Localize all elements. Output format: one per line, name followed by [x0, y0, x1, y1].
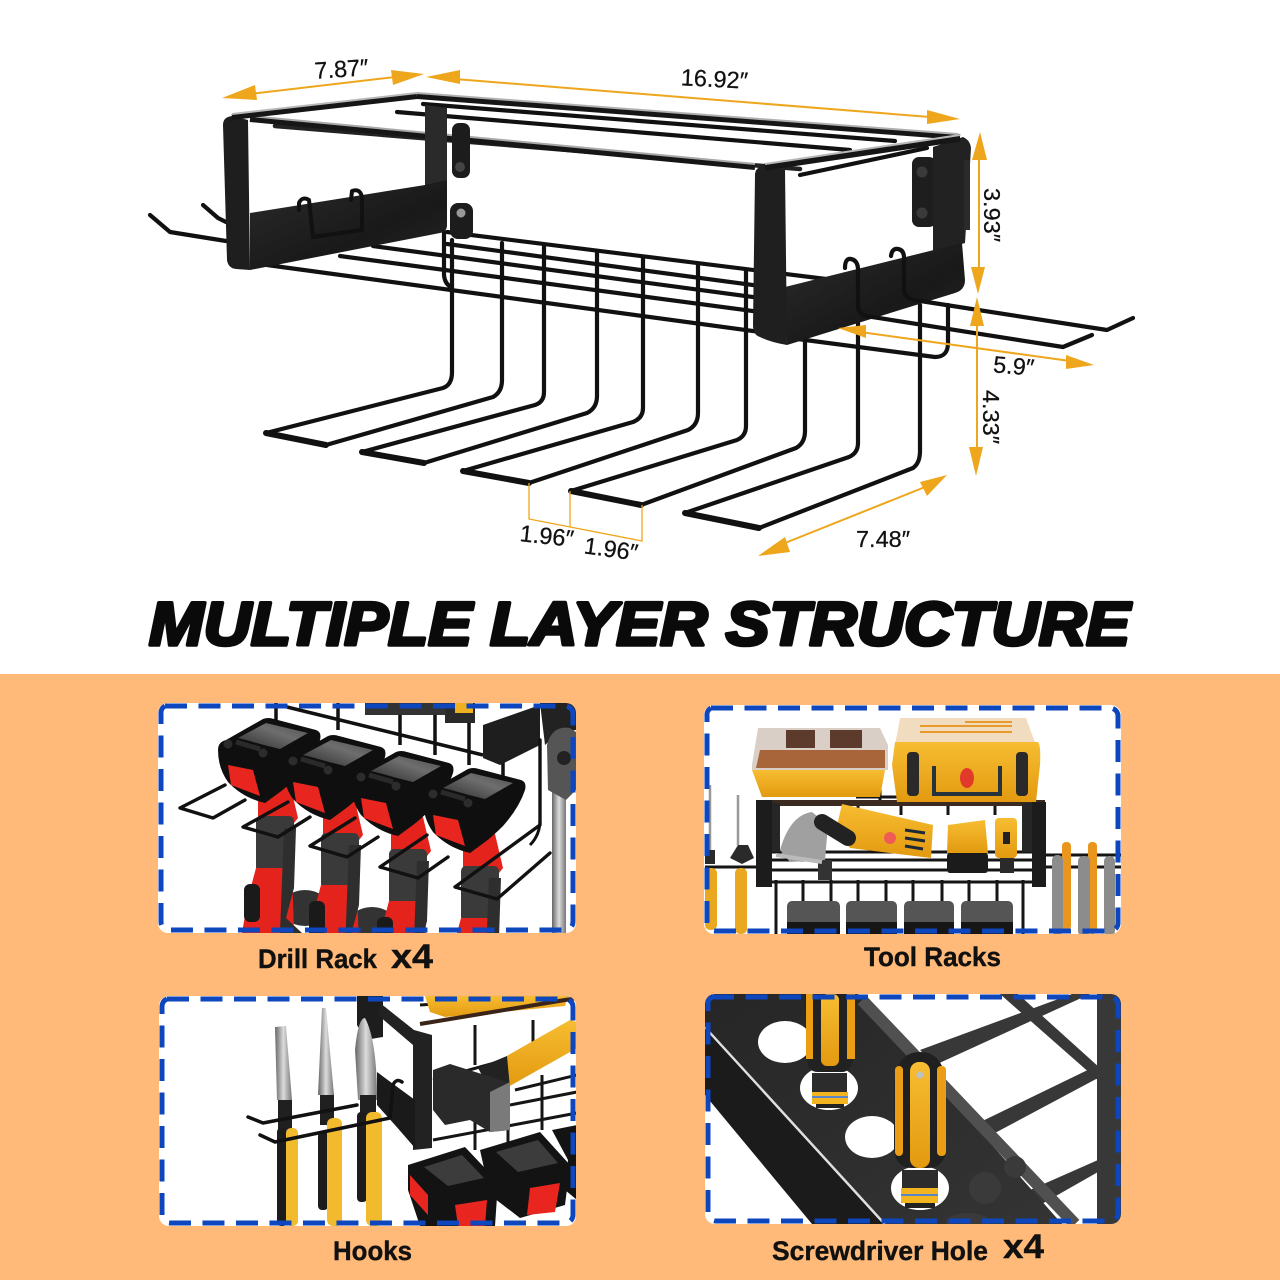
label: screwdriver hole x4: [772, 1228, 1044, 1266]
dimension labels: 5.9″: [992, 351, 1035, 381]
label: drill rack x4: Drill Rack: [258, 944, 378, 974]
dark diagonal upper band: [705, 994, 1062, 1224]
dimension labels: 1.96″: [519, 520, 575, 552]
label: hooks: Hooks: [333, 1236, 412, 1266]
batteries: [218, 718, 526, 853]
panel: tool racks: [704, 705, 1121, 936]
orange background band: [0, 674, 1280, 1280]
label: tool racks: Tool Racks: [864, 942, 1001, 972]
hook wires: [248, 1105, 357, 1123]
product: wire rack with dimensions: [150, 54, 1133, 566]
bracket lines: 1.96 spacing: [529, 483, 642, 541]
screwdriver 1: [805, 994, 855, 1108]
posts: [756, 800, 1045, 806]
dimension labels: 7.48″: [856, 526, 910, 552]
dark diagonal lower band: [705, 1029, 883, 1224]
holes: [758, 1021, 949, 1210]
bolts: [946, 1156, 1026, 1224]
dimension labels: [314, 54, 1035, 566]
yellow case: [896, 718, 1035, 742]
yellow tray: [752, 728, 888, 770]
grid wires: [150, 205, 948, 357]
fork wires: [180, 740, 550, 899]
panel: hooks: [159, 995, 577, 1226]
lower grid wires: [705, 852, 1121, 934]
arrow: 7.87 depth: [222, 70, 424, 100]
yellow battery and tape: [947, 820, 988, 853]
left bracket hooks: [299, 190, 362, 237]
hammer: [505, 1020, 577, 1087]
label: drill rack x4: [258, 938, 433, 976]
grid wires: [420, 995, 577, 1150]
pliers right: [1062, 842, 1071, 930]
dimension labels: 7.87″: [314, 54, 369, 84]
tray: [425, 996, 568, 1017]
dimension labels: 16.92″: [680, 64, 749, 94]
rungs: [920, 994, 1122, 1224]
title: MULTIPLE LAYER STRUCTURE: [149, 590, 1132, 658]
panel: drill rack: [158, 703, 576, 933]
arrow: 4.33 height: [969, 297, 984, 476]
arrow: 7.48 fork length: [758, 475, 947, 556]
pliers: [275, 1008, 382, 1226]
bottom batteries: [787, 901, 1013, 935]
label: drill rack x4: x4: [391, 938, 433, 976]
dimension labels: 1.96″: [583, 532, 640, 566]
arrow: 5.9 hook length: [838, 325, 1094, 369]
top shelf wires: [250, 93, 960, 175]
batteries: [408, 1125, 577, 1226]
right bracket frame: [753, 135, 971, 345]
screwdriver 2: [894, 1052, 946, 1208]
arrow: 16.92 width: [426, 70, 960, 124]
dimension labels: 4.33″: [978, 390, 1004, 444]
panel: screwdriver hole: [705, 994, 1122, 1231]
label: screwdriver hole x4: Screwdriver Hole: [772, 1236, 988, 1266]
pliers left: [710, 785, 738, 850]
right hanging hooks: [845, 249, 1133, 347]
grinder: [836, 804, 933, 858]
five drill fork hangers: [266, 240, 920, 528]
label: screwdriver hole x4: x4: [1003, 1228, 1044, 1266]
left bracket frame: [223, 93, 473, 270]
arrow: 3.93 height: [971, 132, 987, 294]
back plate and frame: [357, 996, 383, 1040]
dimension labels: 3.93″: [979, 188, 1005, 242]
